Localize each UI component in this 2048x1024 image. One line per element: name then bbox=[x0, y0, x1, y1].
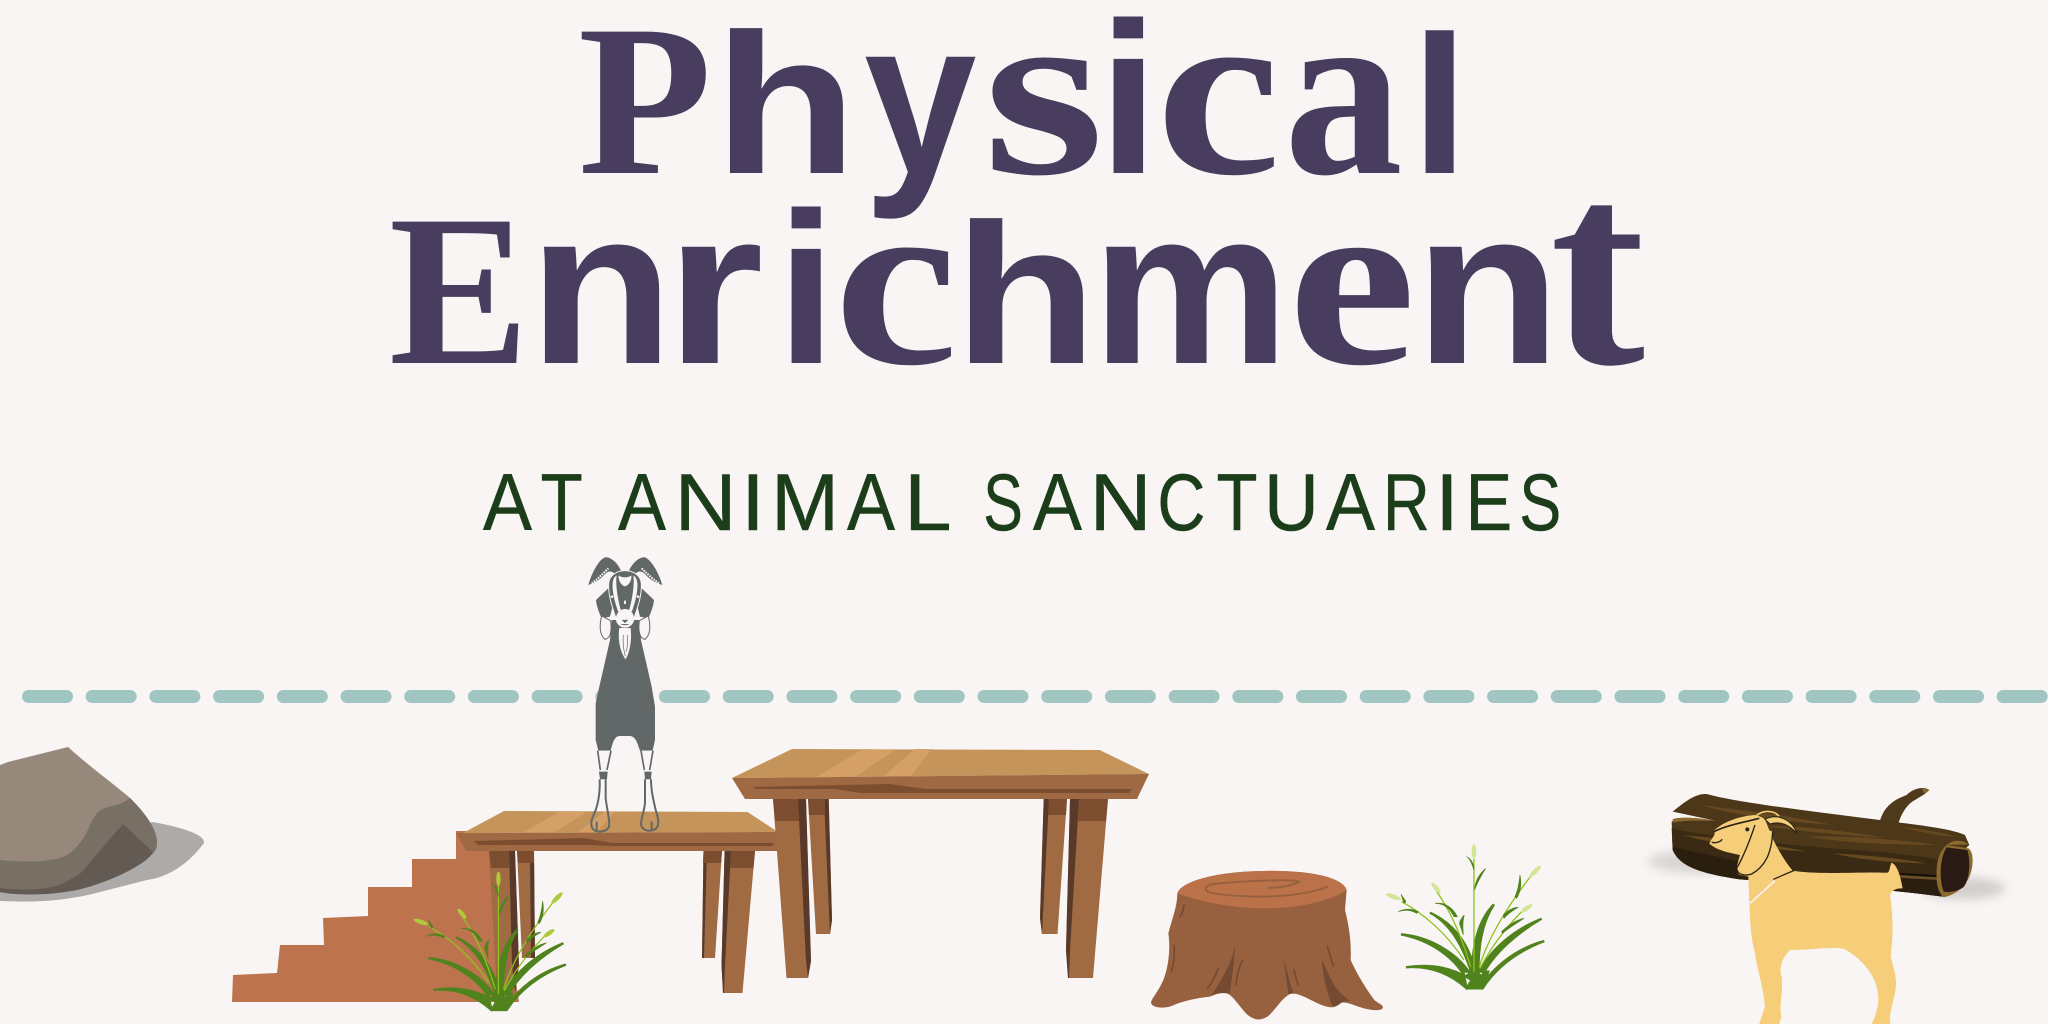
goat head bbox=[588, 557, 662, 659]
small table bbox=[456, 811, 778, 993]
subtitle: N bbox=[1090, 458, 1152, 548]
table leg: back right bbox=[1040, 799, 1067, 934]
icon: grass tuft left bbox=[413, 872, 566, 1010]
title: m bbox=[1092, 164, 1289, 410]
subtitle: M bbox=[771, 458, 839, 548]
legs bbox=[591, 751, 658, 832]
title: e bbox=[1288, 145, 1416, 416]
subtitle: A bbox=[1326, 458, 1375, 548]
table leg: front left bbox=[489, 851, 519, 993]
table leg: front right bbox=[722, 851, 755, 993]
subtitle: S bbox=[1519, 458, 1561, 548]
table leg: front right bbox=[1066, 799, 1108, 978]
subtitle: A bbox=[1033, 458, 1082, 548]
table leg: back right bbox=[702, 851, 722, 958]
title: l bbox=[1411, 0, 1468, 215]
title: h bbox=[954, 183, 1098, 406]
stump bbox=[1151, 871, 1383, 1019]
table leg: back left bbox=[517, 851, 535, 958]
subtitle: A bbox=[483, 458, 532, 548]
subtitle: T bbox=[540, 458, 582, 548]
subtitle: A bbox=[847, 458, 895, 548]
log bbox=[1648, 788, 2005, 900]
subtitle: T bbox=[1216, 458, 1258, 548]
subtitle: N bbox=[674, 458, 737, 548]
title: c bbox=[834, 145, 958, 416]
table leg: back left bbox=[808, 799, 832, 934]
title bbox=[389, 0, 1648, 424]
subtitle: S bbox=[983, 458, 1023, 548]
title: n bbox=[528, 164, 674, 410]
table top bbox=[463, 811, 778, 833]
table apron bbox=[732, 774, 1149, 799]
title: i bbox=[777, 167, 836, 409]
subtitle: L bbox=[904, 458, 950, 548]
large table bbox=[732, 749, 1149, 978]
title: E bbox=[389, 171, 529, 410]
stairs bbox=[232, 831, 519, 1002]
table apron bbox=[456, 832, 778, 851]
rock bbox=[0, 747, 204, 902]
subtitle: U bbox=[1264, 458, 1319, 548]
title: t bbox=[1550, 113, 1648, 424]
goat: grey, standing on table bbox=[588, 557, 662, 832]
subtitle: I bbox=[741, 458, 765, 548]
subtitle: E bbox=[1466, 458, 1512, 548]
table top bbox=[732, 749, 1149, 778]
subtitle: C bbox=[1157, 458, 1205, 548]
icon: grass tuft right bbox=[1385, 844, 1544, 988]
table leg: front left bbox=[773, 799, 811, 978]
title: n bbox=[1414, 164, 1561, 410]
subtitle: R bbox=[1383, 458, 1430, 548]
subtitle: I bbox=[1435, 458, 1459, 548]
subtitle: A bbox=[618, 458, 666, 548]
goat: yellow, right bbox=[1709, 811, 1903, 1024]
title: r bbox=[665, 164, 764, 410]
